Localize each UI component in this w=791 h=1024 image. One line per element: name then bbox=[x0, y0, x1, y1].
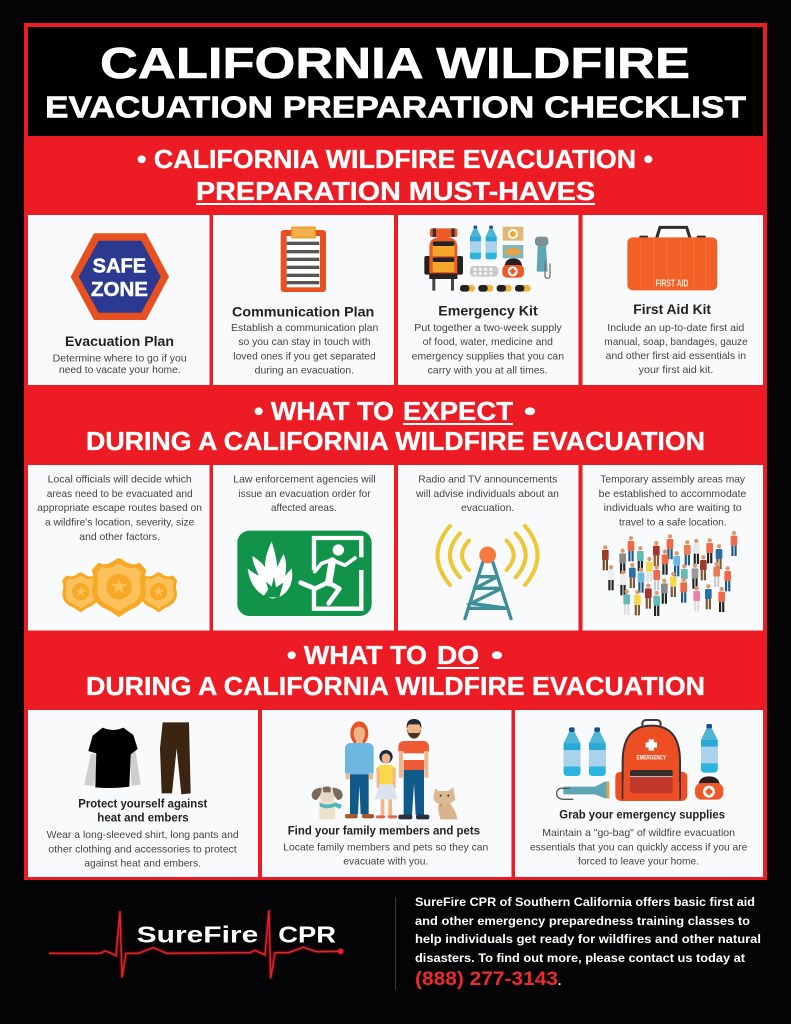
section heading: must-haves: PREPARATION MUST-HAVES bbox=[196, 176, 595, 206]
section heading: must-haves bbox=[137, 144, 653, 206]
card text: of food, water, medicine and bbox=[423, 337, 553, 348]
card text bbox=[37, 475, 202, 543]
section heading: what to expect: • WHAT TO bbox=[254, 396, 394, 426]
panel: protect yourself bbox=[28, 710, 258, 877]
card text: Wear a long-sleeved shirt, long pants and bbox=[47, 830, 239, 841]
panel: evacuation plan bbox=[28, 215, 210, 385]
logo: SureFire CPR: CPR bbox=[278, 921, 336, 947]
card text: Establish a communication plan bbox=[231, 323, 378, 334]
card text bbox=[53, 354, 187, 376]
icon: go-bag with supplies: EMERGENCY bbox=[637, 755, 667, 762]
card text: your first aid kit. bbox=[639, 365, 713, 376]
card text: loved ones if you get separated bbox=[233, 351, 376, 362]
card text bbox=[233, 475, 376, 514]
icon: crowd of people bbox=[602, 531, 737, 616]
card text: so you can stay in touch with bbox=[238, 337, 371, 348]
icon: radio tower bbox=[437, 526, 537, 619]
card text: Determine where to go if you bbox=[53, 354, 187, 364]
panel: emergency supplies bbox=[515, 710, 763, 877]
panel: family and pets bbox=[262, 710, 512, 877]
card text: Put together a two-week supply bbox=[414, 323, 563, 334]
header banner bbox=[28, 27, 763, 136]
panel: local officials bbox=[28, 465, 210, 630]
panel: emergency kit bbox=[398, 215, 578, 385]
card text: against heat and embers. bbox=[84, 858, 201, 869]
card text bbox=[415, 475, 559, 514]
card text: essentials that you can quickly access if you are bbox=[530, 842, 748, 853]
logo: SureFire CPR bbox=[49, 910, 344, 978]
footer text: SureFire CPR of Southern California offers basic first aid bbox=[415, 897, 755, 909]
footer text bbox=[415, 897, 761, 990]
panel: radio and tv bbox=[398, 465, 578, 630]
footer text: . bbox=[558, 976, 561, 988]
section heading: what to do: • WHAT TO bbox=[287, 640, 427, 670]
icon: safe zone sign: SAFE bbox=[93, 256, 146, 278]
card text: Local officials will decide which bbox=[48, 475, 192, 486]
card text: Maintain a "go-bag" of wildfire evacuation bbox=[542, 828, 735, 839]
card text: and other first aid essentials in bbox=[606, 351, 746, 362]
card text bbox=[599, 475, 747, 528]
card title: heat and embers bbox=[97, 813, 189, 825]
card text: a wildfire's location, severity, size bbox=[45, 517, 195, 528]
icon: first aid case: FIRST AID bbox=[656, 279, 688, 290]
card text: appropriate escape routes based on bbox=[37, 503, 202, 514]
section heading: what to expect: DURING A CALIFORNIA WILDFIRE EVACUATION bbox=[86, 426, 705, 456]
section heading: what to do: • bbox=[491, 640, 503, 670]
card title: Communication Plan bbox=[232, 304, 374, 320]
section heading: what to do bbox=[86, 640, 705, 701]
card title: Emergency Kit bbox=[438, 302, 538, 318]
section heading: what to do: DO bbox=[437, 640, 479, 670]
card title bbox=[78, 798, 207, 825]
footer text: and other emergency preparedness training classes to bbox=[415, 916, 750, 928]
card title: Grab your emergency supplies bbox=[559, 809, 725, 821]
card text bbox=[530, 828, 748, 867]
icon: go-bag with supplies bbox=[557, 720, 723, 801]
logo: SureFire CPR: SureFire bbox=[137, 921, 258, 947]
icon: police badges bbox=[62, 558, 177, 617]
card text: issue an evacuation order for bbox=[238, 489, 371, 500]
icon: safe zone sign: ZONE bbox=[91, 279, 148, 301]
card text: individuals who are waiting to bbox=[604, 503, 742, 514]
card text: areas need to be evacuated and bbox=[47, 489, 193, 500]
card text: evacuation. bbox=[461, 503, 514, 514]
card text bbox=[231, 323, 378, 376]
card text: other clothing and accessories to protect bbox=[48, 844, 237, 855]
section heading: what to expect: EXPECT bbox=[403, 396, 513, 426]
title line 2: EVACUATION PREPARATION CHECKLIST bbox=[45, 90, 746, 124]
panel: assembly areas bbox=[582, 465, 763, 630]
icon: fire exit sign bbox=[237, 531, 372, 616]
card text: and other factors. bbox=[79, 532, 160, 543]
card text bbox=[47, 830, 239, 869]
card text bbox=[604, 323, 748, 376]
icon: safe zone sign bbox=[71, 233, 169, 320]
card text: during an evacuation. bbox=[255, 365, 354, 376]
panel: first aid kit bbox=[582, 215, 763, 385]
panel: communication plan bbox=[213, 215, 394, 385]
card text: Locate family members and pets so they can bbox=[283, 842, 488, 853]
card text: manual, soap, bandages, gauze bbox=[604, 337, 748, 348]
icon: family with dog and cat bbox=[312, 719, 457, 819]
panel: law enforcement bbox=[213, 465, 394, 630]
card text: be established to accommodate bbox=[599, 489, 747, 500]
card text: affected areas. bbox=[271, 503, 337, 514]
card text bbox=[283, 842, 488, 867]
card text: carry with you at all times. bbox=[428, 365, 548, 376]
title line 1: CALIFORNIA WILDFIRE bbox=[100, 40, 690, 88]
card text: forced to leave your home. bbox=[578, 856, 699, 867]
footer text: disasters. To find out more, please contact us today at bbox=[415, 953, 745, 965]
card text: Law enforcement agencies will bbox=[233, 475, 376, 486]
card text: emergency supplies that you can bbox=[412, 351, 564, 362]
section heading: must-haves: • CALIFORNIA WILDFIRE EVACUATION • bbox=[137, 144, 653, 174]
red frame bbox=[24, 23, 767, 880]
section heading: what to expect bbox=[86, 396, 705, 456]
card text: travel to a safe location. bbox=[619, 517, 727, 528]
card text bbox=[412, 323, 564, 376]
card text: Include an up-to-date first aid bbox=[607, 323, 745, 334]
icon: long-sleeved shirt and pants bbox=[84, 722, 191, 794]
icon: clipboard bbox=[281, 227, 326, 292]
card text: evacuate with you. bbox=[343, 856, 428, 867]
section heading: what to do: DURING A CALIFORNIA WILDFIRE EVACUATION bbox=[86, 671, 705, 701]
card text: Temporary assembly areas may bbox=[600, 475, 746, 486]
icon: emergency kit items bbox=[424, 226, 550, 292]
card title: Protect yourself against bbox=[78, 798, 207, 810]
card text: will advise individuals about an bbox=[415, 489, 559, 500]
card text: need to vacate your home. bbox=[59, 365, 181, 376]
card title: First Aid Kit bbox=[633, 301, 711, 317]
footer text: help individuals get ready for wildfires and other natural bbox=[415, 934, 761, 946]
card title: Evacuation Plan bbox=[65, 333, 174, 349]
section heading: what to expect: • bbox=[524, 396, 536, 426]
phone number: (888) 277-3143 bbox=[415, 969, 558, 990]
card title: Find your family members and pets bbox=[288, 825, 480, 837]
icon: first aid case bbox=[627, 227, 717, 290]
card text: Radio and TV announcements bbox=[418, 475, 557, 486]
